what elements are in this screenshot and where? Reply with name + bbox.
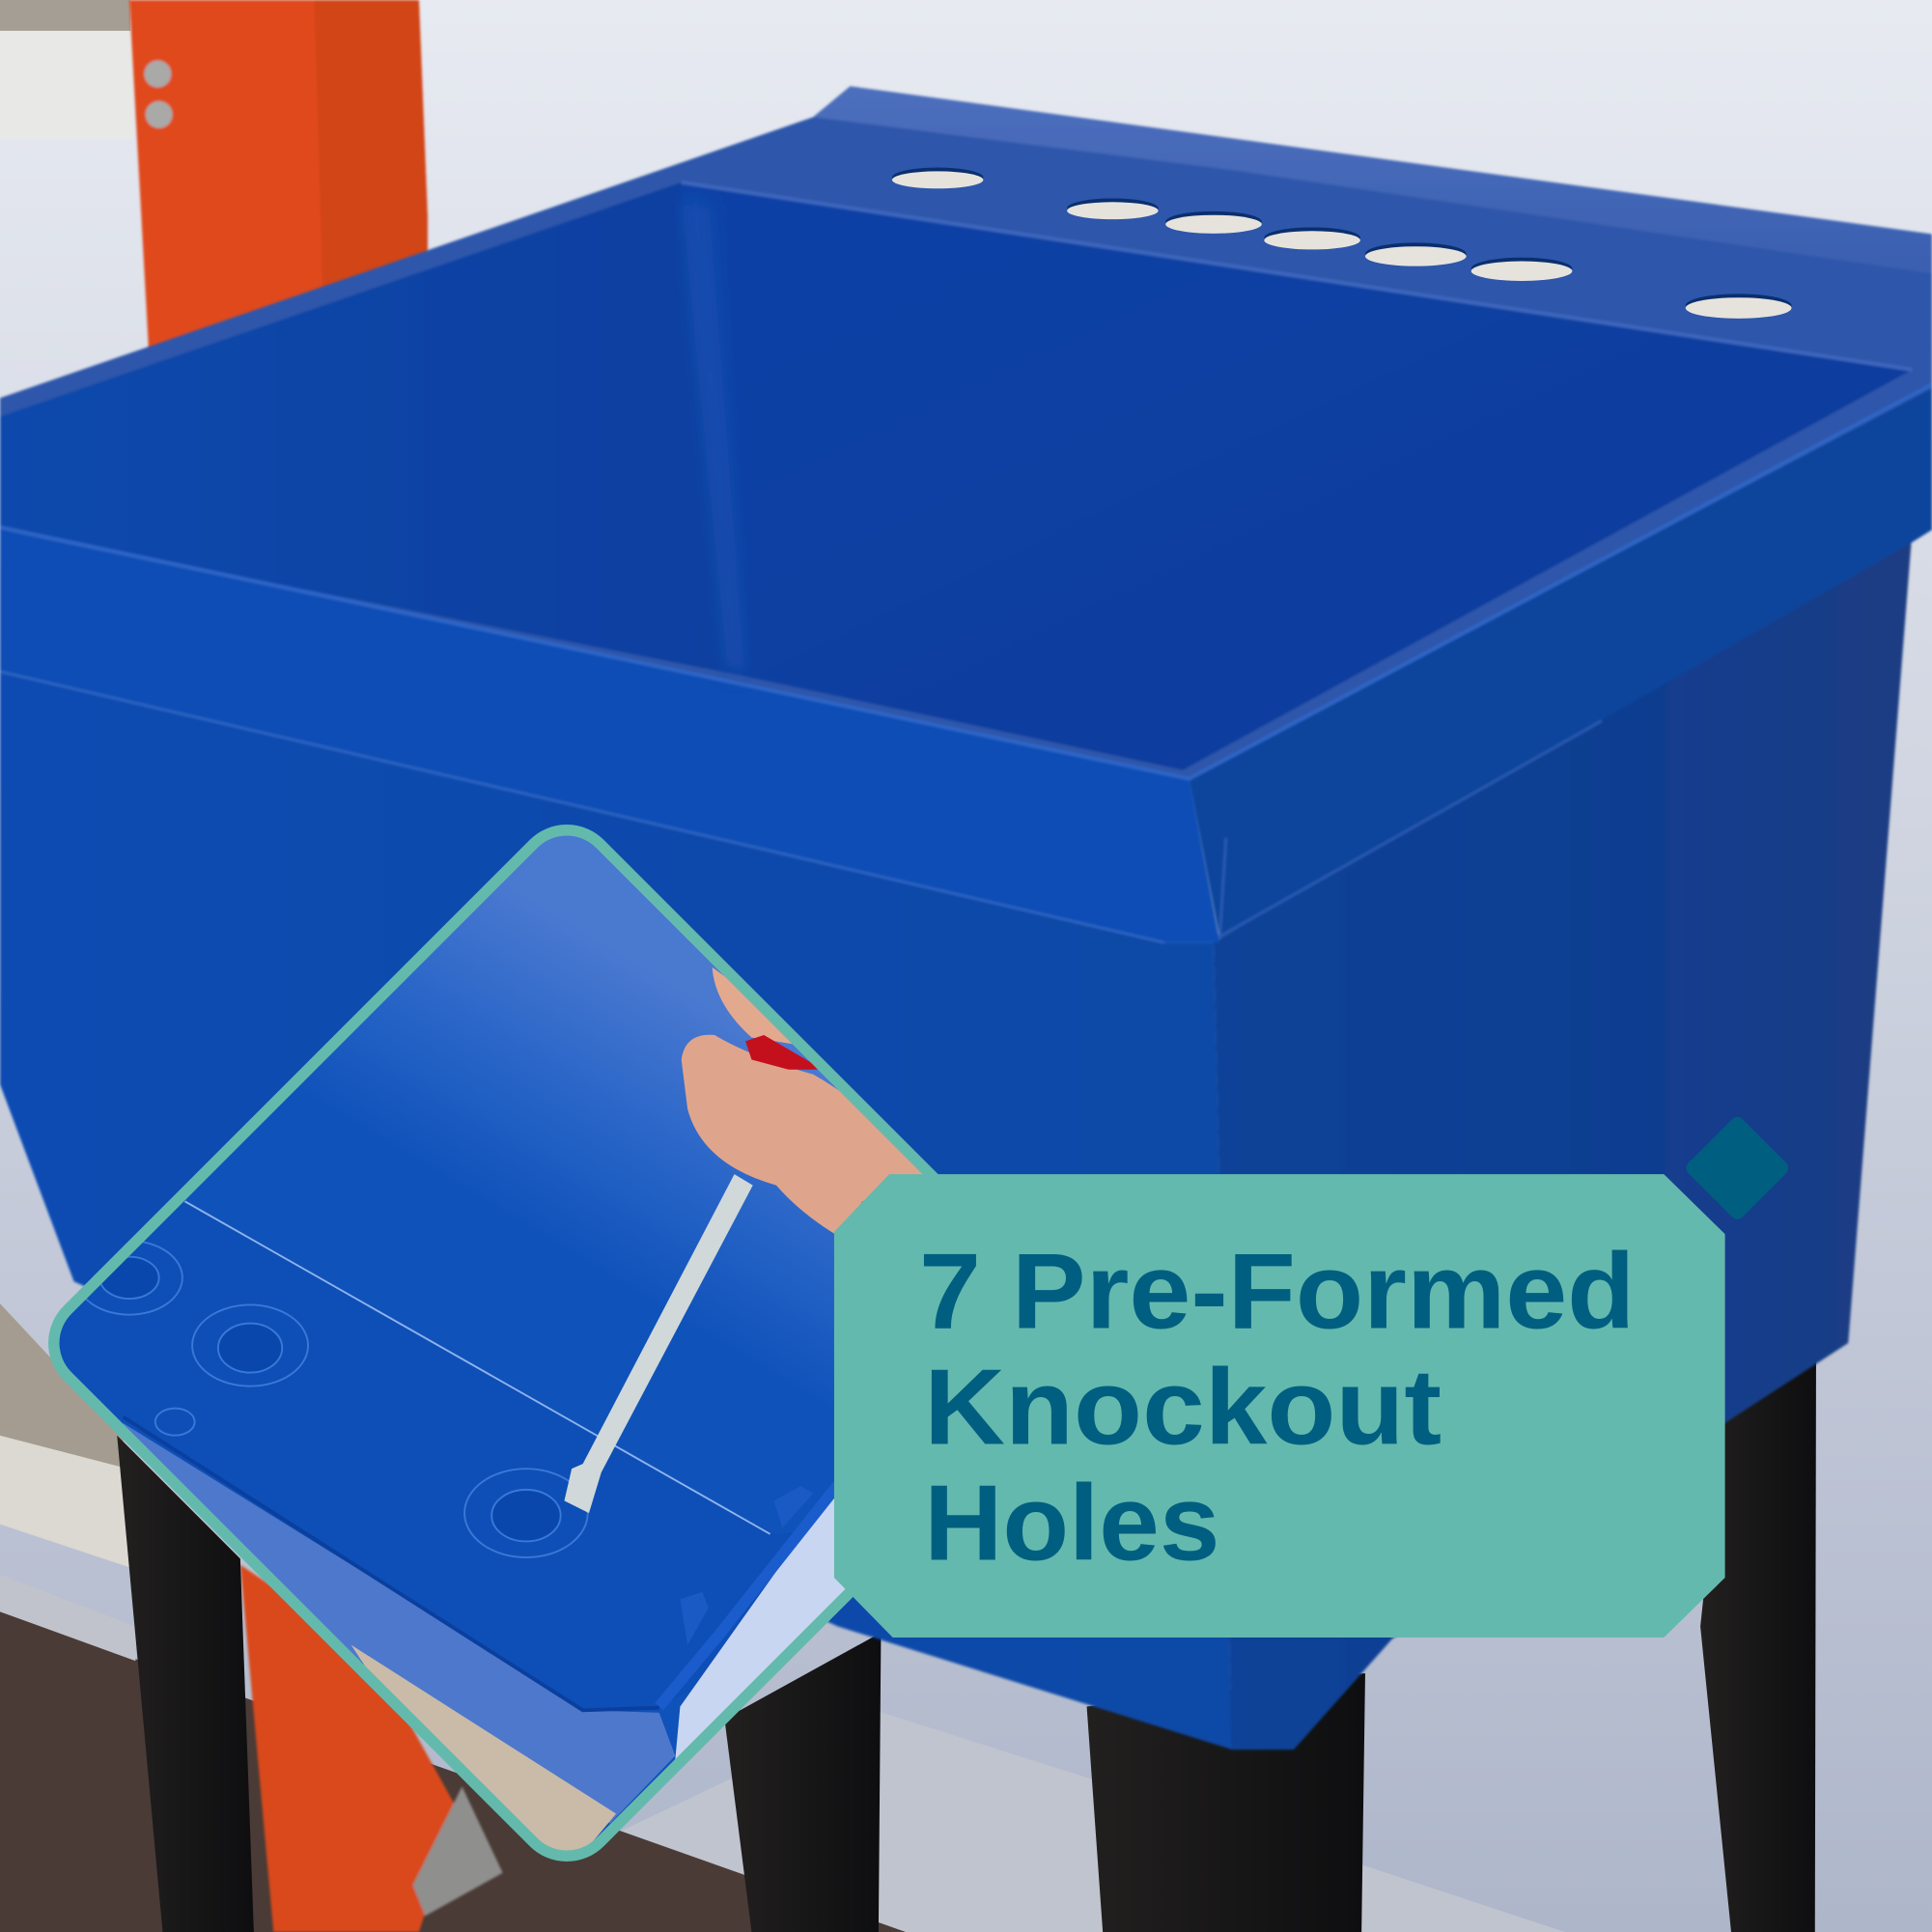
interior back wall (682, 182, 1913, 770)
inset border (35, 811, 1099, 1875)
sink legs (117, 1313, 1816, 1932)
corner diamond accent (1683, 1114, 1791, 1222)
knockout holes (892, 168, 1792, 319)
floor (0, 1611, 906, 1932)
backsplash (813, 86, 1932, 273)
left shelf top (0, 0, 133, 139)
wood floor piece (351, 1645, 616, 1873)
baseboard (616, 1710, 1565, 1932)
white side edge (675, 1485, 851, 1759)
inset photo: knocking out a hole (48, 825, 938, 1862)
top deck (0, 86, 1932, 779)
interior corner highlight (682, 197, 745, 675)
headline line 2: Knockout (924, 1347, 1442, 1468)
screwdriver handle (745, 1035, 823, 1070)
headline line 1: 7 Pre-Formed (919, 1231, 1635, 1352)
ladder bottom (240, 1565, 503, 1932)
small tabs (680, 1592, 709, 1645)
left lower shelf (0, 1303, 135, 1661)
inset blue surface (185, 836, 863, 1840)
hand (713, 967, 793, 1045)
rim front (0, 527, 1219, 942)
headline line 3: Holes (924, 1463, 1219, 1583)
ladder top (129, 0, 428, 357)
seam line (184, 1201, 770, 1534)
lower panel (37, 1201, 862, 1710)
screwdriver shaft (564, 1174, 753, 1513)
sink body front (0, 665, 1232, 1750)
rim side (1189, 382, 1932, 938)
callout panel (835, 1175, 1723, 1637)
interior left wall (0, 182, 740, 675)
sink body side (1214, 530, 1913, 1750)
knockout discs (76, 1241, 588, 1557)
lip of sink (124, 1423, 675, 1824)
edge highlights (682, 182, 1913, 370)
